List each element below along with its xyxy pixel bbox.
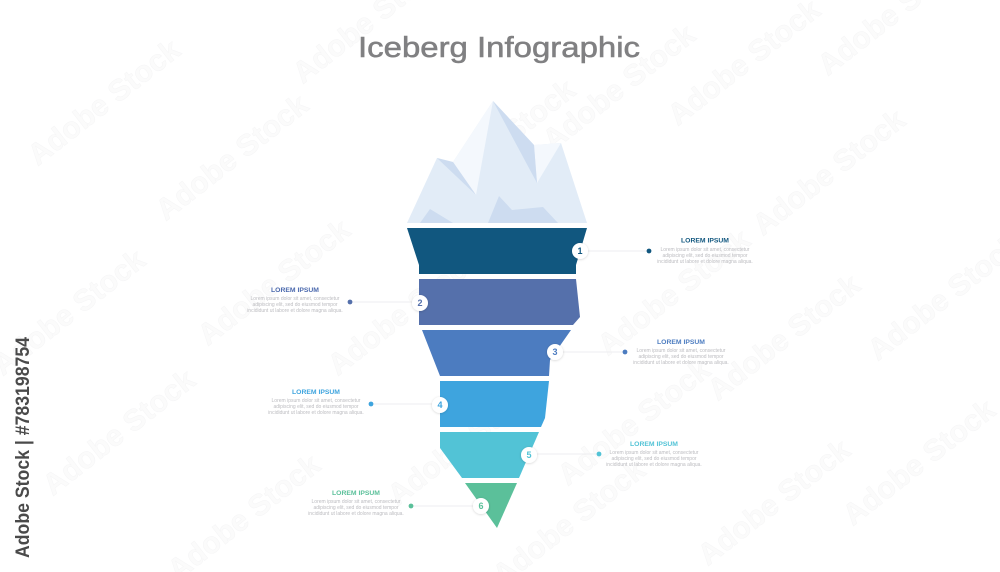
iceberg tip <box>407 101 587 223</box>
watermark pattern: Adobe Stock <box>692 433 857 572</box>
callout 1: Lorem ipsum dolor sit amet, consectetur <box>661 247 750 253</box>
base shadow left <box>420 209 453 223</box>
watermark pattern: Adobe Stock <box>150 88 315 227</box>
callout 5 <box>521 441 702 468</box>
callout 1: incididunt ut labore et dolore magna aliqua. <box>657 259 753 265</box>
callout 5: LOREM IPSUM <box>630 441 678 448</box>
watermark pattern: Adobe Stock <box>22 33 187 172</box>
light facet right <box>534 143 561 183</box>
callout 4: Lorem ipsum dolor sit amet, consectetur <box>272 398 361 404</box>
callout 4: adipiscing elit, sed do eiusmod tempor <box>273 404 359 410</box>
shadow facet peak <box>493 101 537 183</box>
shadow facet left <box>437 158 476 195</box>
watermark pattern: Adobe Stock <box>322 243 487 382</box>
callout 3: LOREM IPSUM <box>657 339 705 346</box>
callout 3: Lorem ipsum dolor sit amet, consectetur <box>637 348 726 354</box>
callout 6: adipiscing elit, sed do eiusmod tempor <box>313 505 399 511</box>
callout 5: 5 <box>526 450 532 460</box>
light facet left <box>453 101 493 195</box>
callout 4: LOREM IPSUM <box>292 389 340 396</box>
callout 3: incididunt ut labore et dolore magna aliqua. <box>633 360 729 366</box>
watermark pattern: Adobe Stock <box>552 353 717 492</box>
callout 2 <box>247 287 428 314</box>
band 1 <box>407 228 587 274</box>
band 3 <box>422 330 571 376</box>
callout 6: LOREM IPSUM <box>332 490 380 497</box>
callout 5: adipiscing elit, sed do eiusmod tempor <box>611 456 697 462</box>
callout 6: Lorem ipsum dolor sit amet, consectetur <box>312 499 401 505</box>
callout 3: 3 <box>552 347 558 357</box>
callout 4: incididunt ut labore et dolore magna aliqua. <box>268 410 364 416</box>
watermark pattern: Adobe Stock <box>192 213 357 352</box>
callout 2: LOREM IPSUM <box>271 287 319 294</box>
callout 5: incididunt ut labore et dolore magna aliqua. <box>606 462 702 468</box>
base shadow centre <box>488 196 558 223</box>
callout 6: 6 <box>478 501 484 511</box>
callout 2: adipiscing elit, sed do eiusmod tempor <box>252 302 338 308</box>
band 6 <box>465 483 517 528</box>
callout 3 <box>547 339 729 366</box>
band 4 <box>440 381 549 427</box>
callout 1: adipiscing elit, sed do eiusmod tempor <box>662 253 748 259</box>
watermark pattern: Adobe Stock <box>747 103 912 242</box>
watermark pattern: Adobe Stock <box>837 393 1000 532</box>
callout 5: Lorem ipsum dolor sit amet, consectetur <box>610 450 699 456</box>
callout 1 <box>572 238 753 265</box>
watermark pattern: Adobe Stock <box>37 363 202 502</box>
callout 1: LOREM IPSUM <box>681 238 729 244</box>
title: Iceberg Infographic <box>358 32 640 64</box>
callout 4: 4 <box>437 400 443 410</box>
band 2 <box>419 279 580 325</box>
callout 2: incididunt ut labore et dolore magna aliqua. <box>247 308 343 314</box>
callout 1: 1 <box>577 246 583 256</box>
callout 3: adipiscing elit, sed do eiusmod tempor <box>638 354 724 360</box>
callout 2: 2 <box>417 298 423 308</box>
watermark pattern: Adobe Stock <box>417 73 582 212</box>
side credit: Adobe Stock | #783198754 <box>13 337 34 558</box>
callout 6 <box>308 490 489 517</box>
band 5 <box>440 432 539 478</box>
watermark pattern: Adobe Stock <box>592 223 757 362</box>
watermark pattern: Adobe Stock <box>382 373 547 512</box>
callout 6: incididunt ut labore et dolore magna aliqua. <box>308 511 404 517</box>
watermark pattern: Adobe Stock <box>537 18 702 157</box>
callout 4 <box>268 389 448 416</box>
watermark pattern: Adobe Stock <box>702 268 867 407</box>
callout 2: Lorem ipsum dolor sit amet, consectetur <box>251 296 340 302</box>
